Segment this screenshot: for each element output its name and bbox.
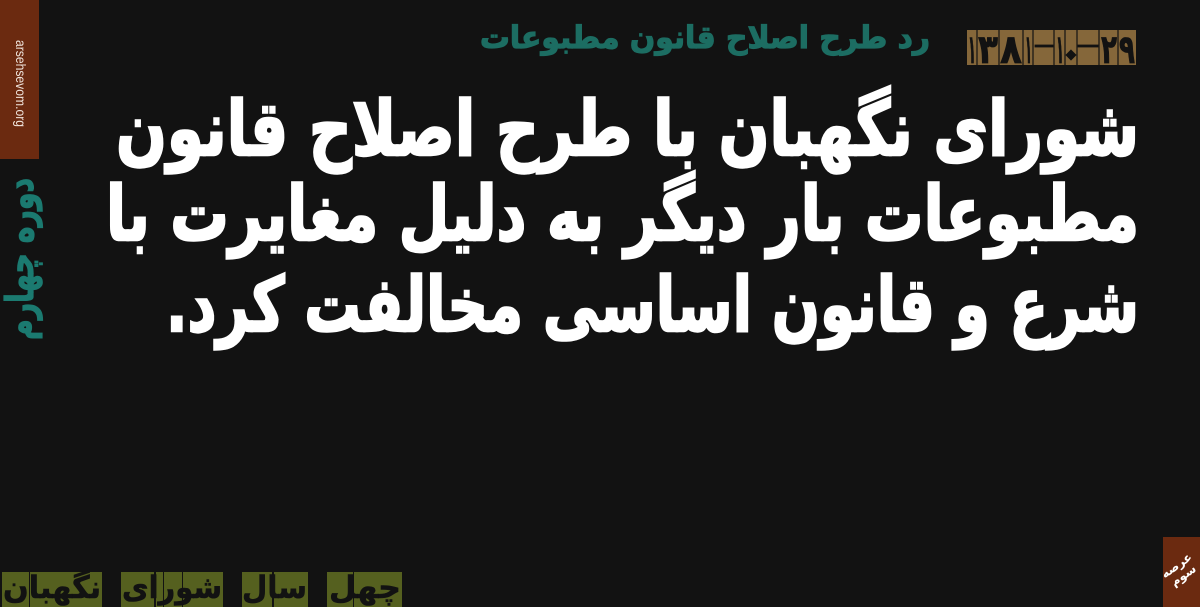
footer stamp: forty years of the guardian council: شورای bbox=[122, 570, 222, 606]
date stamp: ۱ bbox=[1025, 27, 1032, 73]
date stamp bbox=[967, 27, 1136, 73]
date stamp: ۱ bbox=[1056, 27, 1064, 73]
panel: site tab bbox=[0, 0, 39, 159]
date stamp: ۹ bbox=[1119, 27, 1135, 73]
footer stamp: forty years of the guardian council: سال bbox=[242, 570, 307, 606]
logo text: سوم bbox=[1168, 561, 1199, 590]
footer stamp: forty years of the guardian council bbox=[2, 569, 402, 607]
footer stamp: forty years of the guardian council: چهل bbox=[329, 570, 401, 606]
logo tab bbox=[1158, 537, 1200, 607]
site address: arsehsevom.org bbox=[13, 40, 28, 127]
date stamp: ۲ bbox=[1101, 27, 1117, 73]
logo text: عرصه bbox=[1158, 550, 1195, 581]
headline bbox=[106, 84, 1139, 350]
date stamp: ۳ bbox=[978, 27, 998, 73]
footer stamp: forty years of the guardian council: نگهبان bbox=[3, 569, 101, 606]
subtitle: رد طرح اصلاح قانون مطبوعات bbox=[480, 20, 930, 56]
date stamp: ۱ bbox=[968, 27, 976, 73]
date stamp: ۸ bbox=[1000, 27, 1022, 73]
